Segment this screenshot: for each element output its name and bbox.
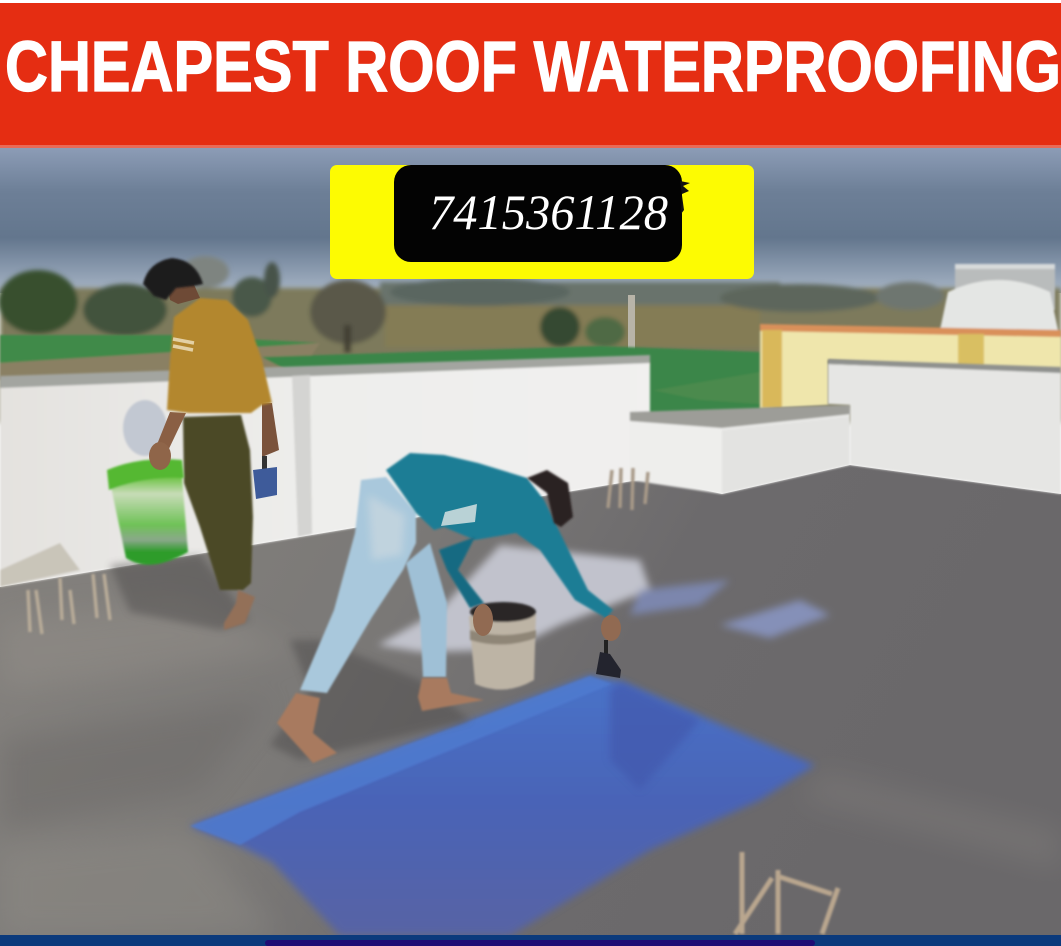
sky (0, 148, 1061, 293)
far right wall (828, 359, 1061, 494)
green bucket (107, 459, 188, 565)
green fields (0, 335, 760, 425)
rebar stakes, middle (608, 468, 648, 510)
utility pole (628, 295, 635, 357)
back foot (418, 678, 484, 711)
trowel (253, 456, 277, 499)
bottom band (0, 935, 1061, 946)
old paint bucket (469, 602, 536, 690)
roof floor (0, 465, 1061, 936)
front leg and hip jeans (300, 477, 416, 693)
shirt print (441, 504, 477, 526)
phone number callout (330, 165, 754, 279)
left parapet wall (0, 355, 650, 587)
shadow (110, 555, 250, 630)
foot (224, 590, 255, 630)
back leg jeans (406, 543, 447, 677)
yellow backing (330, 165, 754, 279)
worker painting the roof (270, 453, 621, 763)
header banner (0, 0, 1061, 148)
floor shading (0, 600, 1061, 936)
rebar, bottom (735, 852, 838, 934)
phone number: 7415361128 (429, 184, 668, 240)
blue waterproof coating (190, 676, 815, 936)
head (527, 470, 573, 527)
neck and face (168, 280, 200, 304)
bare arm left (152, 412, 186, 457)
head (143, 258, 203, 300)
rebar stakes, left (28, 574, 110, 634)
sleeve stripes (173, 339, 194, 350)
house and water tank (760, 264, 1061, 409)
bare arm right (262, 403, 279, 457)
hand on bucket (149, 442, 171, 470)
plate smudge (680, 181, 690, 214)
near arm (439, 537, 484, 608)
striped yellow shirt (167, 298, 272, 413)
shadow (270, 640, 470, 760)
brush hand (601, 615, 621, 641)
wide brush (596, 640, 621, 678)
small right wall (630, 405, 852, 494)
hand on old bucket (473, 604, 493, 636)
worker with green bucket (107, 258, 279, 630)
teal shirt (386, 453, 613, 618)
front foot (277, 693, 337, 763)
trousers (183, 415, 253, 590)
white primer patches (378, 545, 830, 652)
jeans highlights (368, 495, 405, 560)
black plate (394, 165, 682, 262)
distant landscape (0, 256, 1061, 423)
